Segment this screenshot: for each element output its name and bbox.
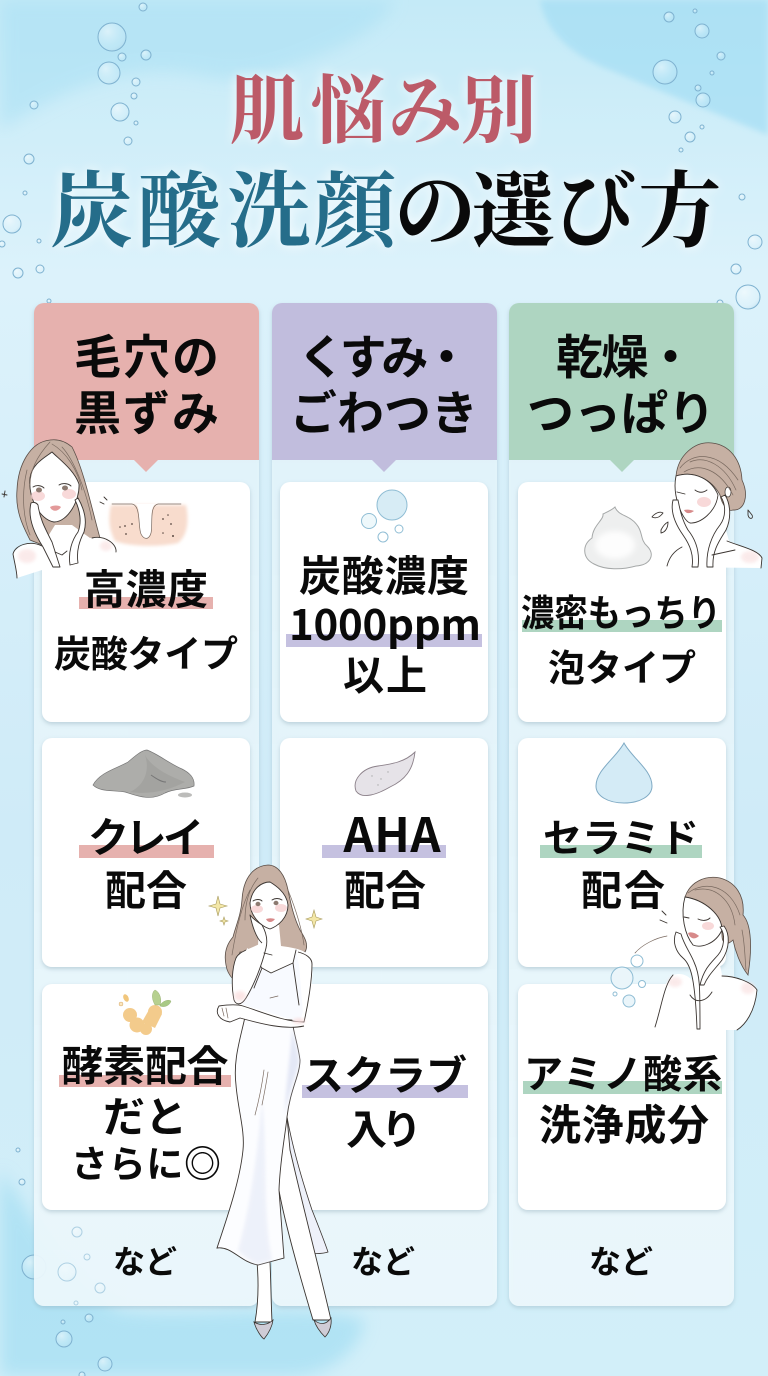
note: etc: など: [113, 1237, 177, 1283]
card: ceramide: 配合: [581, 857, 665, 917]
icon: foam: [585, 507, 651, 569]
note: etc: など: [589, 1237, 653, 1283]
icon: water drop: [596, 743, 652, 803]
card: dense foam: 泡タイプ: [548, 638, 696, 692]
card: scrub: スクラブ: [303, 1042, 467, 1102]
illustration: woman with bubbles: [611, 877, 757, 1030]
card: 1000ppm: 以上: [343, 642, 427, 702]
note: etc: など: [351, 1237, 415, 1283]
illustration: woman with pores: [2, 440, 116, 578]
icon: carbonation bubbles: [362, 490, 407, 542]
card: AHA: 配合: [344, 857, 426, 917]
illustration: standing woman in white dress: [209, 865, 331, 1339]
card: enzyme: さらに◎: [71, 1134, 221, 1188]
card: AHA: [280, 738, 488, 967]
header: dryness: つっぱり: [527, 375, 715, 444]
card: high concentration: 高濃度: [84, 556, 208, 616]
card: high concentration: 炭酸タイプ: [54, 624, 238, 678]
card: scrub: [280, 984, 488, 1210]
card: clay: 配合: [105, 857, 187, 917]
card: enzyme: [42, 984, 250, 1210]
panel: dryness: [509, 303, 734, 1306]
dress bodice: [238, 948, 306, 1022]
card: clay: クレイ: [88, 804, 204, 864]
header: dullness: [272, 303, 497, 472]
left leg: [255, 1262, 272, 1322]
title: [50, 52, 722, 264]
shoes: [254, 1320, 273, 1339]
card: enzyme: だと: [103, 1084, 187, 1145]
header: pores: [34, 303, 259, 472]
card: clay: [42, 738, 250, 967]
sparkles: [209, 896, 322, 928]
card: amino acid: [518, 984, 726, 1210]
arms: [232, 915, 267, 1004]
card: ceramide: セラミド: [543, 808, 699, 864]
title line 2: 炭酸洗顔の選び方: [50, 144, 722, 264]
dress skirt: [217, 1017, 300, 1265]
right leg: [278, 1117, 331, 1320]
panel: pores: [34, 303, 259, 1306]
card: amino acid: 洗浄成分: [539, 1092, 709, 1153]
card: 1000ppm: 1000ppm: [289, 592, 481, 653]
right skirt panel: [280, 1117, 328, 1258]
faint bubbles showing through the panel: [58, 1227, 105, 1305]
header: pores: 黒ずみ: [74, 375, 219, 444]
illustration: woman with foam: [652, 443, 762, 568]
header: dryness: 乾燥・: [556, 319, 694, 388]
card: enzyme: 酵素配合: [62, 1033, 228, 1094]
card: AHA: AHA: [342, 797, 441, 866]
panel: dullness: [272, 303, 497, 1306]
icon: clay powder: [93, 750, 194, 798]
icon: ginger: [119, 990, 171, 1035]
icon: pore skin: [109, 504, 187, 546]
header: pores: 毛穴の: [74, 319, 219, 388]
card: ceramide: [518, 738, 726, 967]
header: dullness: くすみ・: [298, 319, 470, 388]
card: dense foam: [518, 482, 726, 722]
card: 1000ppm: [280, 482, 488, 722]
icon: cream swatch: [355, 752, 415, 796]
header: dryness: [509, 303, 734, 472]
title line 1: 肌悩み別: [229, 52, 537, 159]
card: dense foam: 濃密もっちり: [521, 583, 721, 637]
card: amino acid: アミノ酸系: [524, 1044, 722, 1100]
card: scrub: 入り: [346, 1096, 422, 1156]
card: 1000ppm: 炭酸濃度: [299, 543, 469, 604]
card: high concentration: [42, 482, 250, 722]
header: dullness: ごわつき: [290, 375, 478, 444]
